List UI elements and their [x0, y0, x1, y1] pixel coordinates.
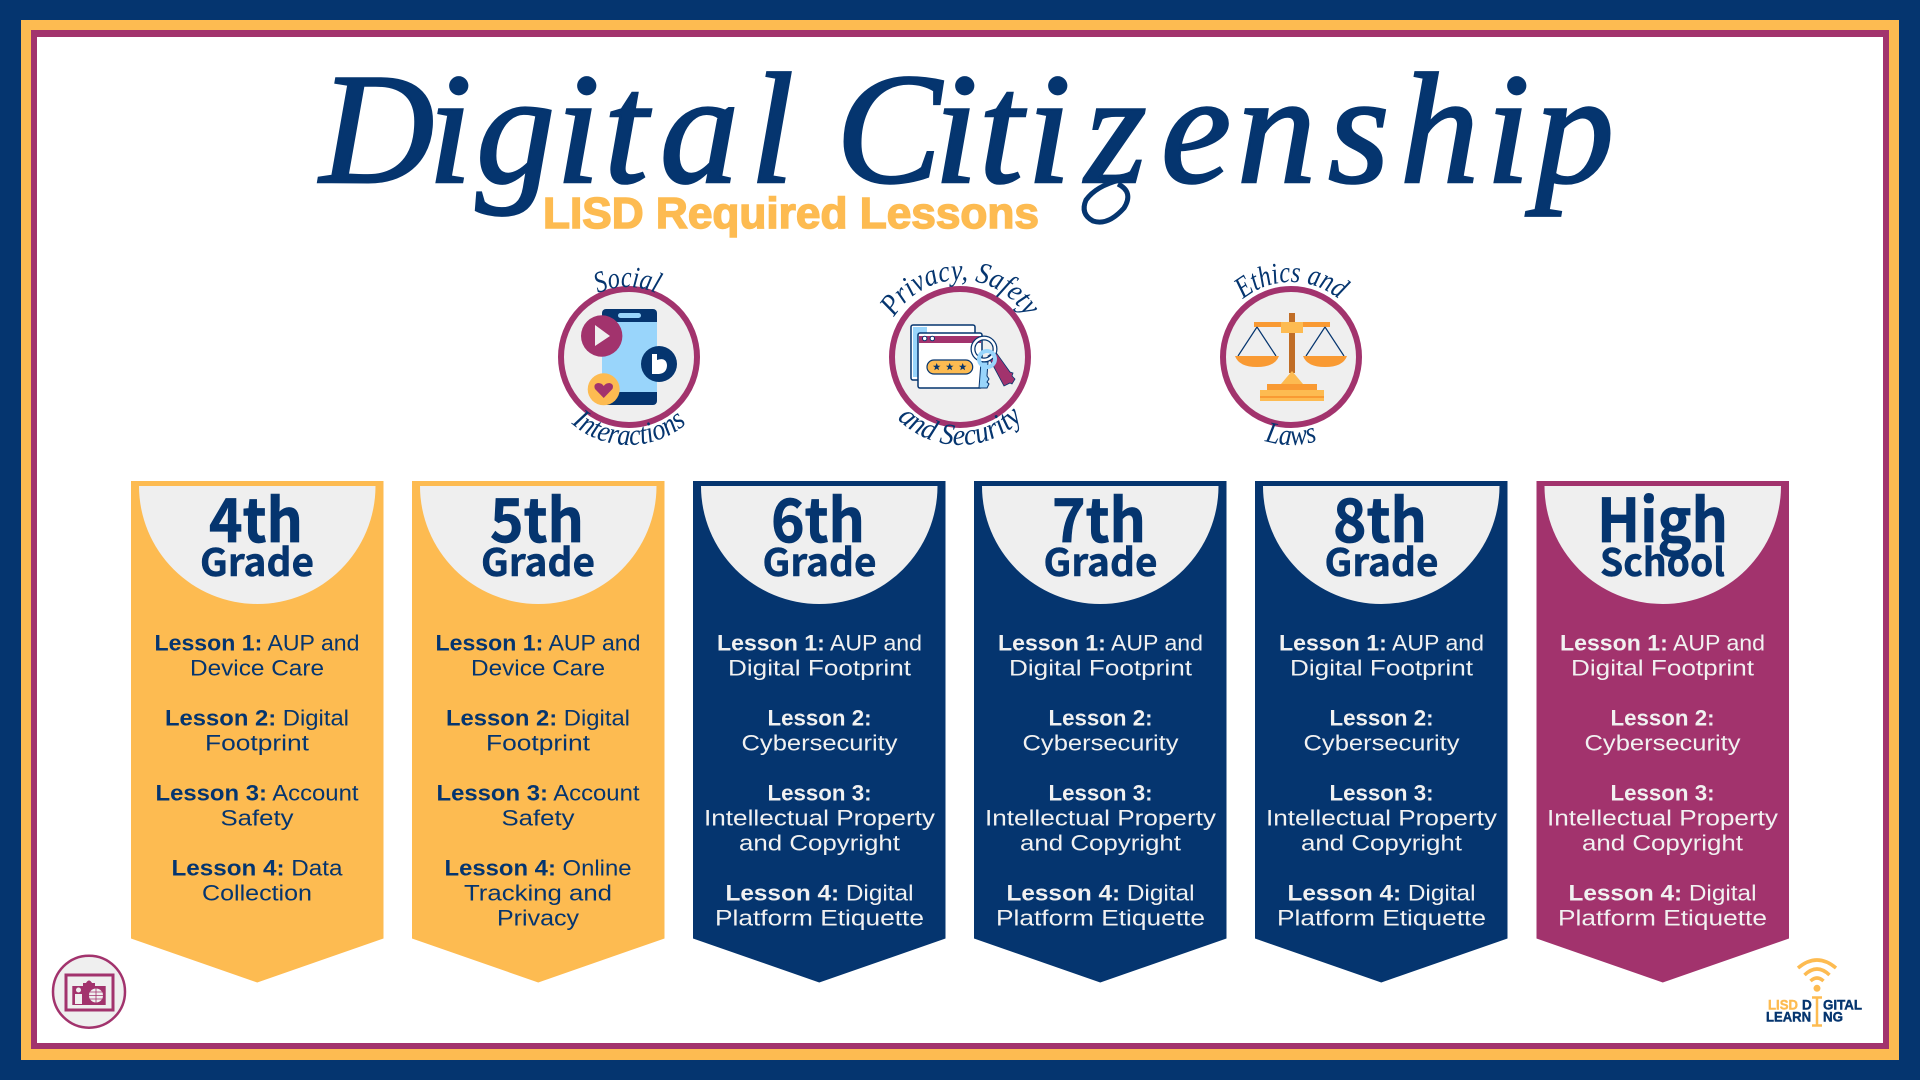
label: and Security: and Security: [898, 408, 1020, 446]
logo text: [1766, 998, 1862, 1024]
label: Ethics and: Ethics and: [1234, 264, 1352, 300]
panel: 7th grade: [974, 473, 1226, 982]
lessons: high school: Intellectual Property: [1547, 806, 1779, 830]
lessons: 4th grade: Safety: [220, 806, 294, 830]
icon: social interactions: [558, 268, 700, 446]
label: Social: Social: [594, 268, 664, 293]
lessons: 7th grade: Cybersecurity: [1022, 730, 1179, 756]
lessons: 5th grade: [436, 630, 640, 930]
lessons: 8th grade: Lesson 3:: [1330, 780, 1434, 806]
lessons: 4th grade: Device Care: [190, 656, 324, 680]
lessons: 5th grade: Lesson 1: AUP and: [436, 630, 640, 656]
label: Privacy, Safety: Privacy, Safety: [880, 264, 1038, 318]
lessons: 8th grade: [1266, 630, 1498, 930]
logo: LISD Digital Learning: [1766, 960, 1862, 1026]
lessons: 8th grade: Digital Footprint: [1290, 656, 1474, 680]
lessons: 5th grade: Footprint: [486, 730, 591, 756]
subtitle: LISD Required Lessons: [543, 189, 1039, 238]
heading: 8th grade: [1324, 473, 1438, 587]
heading: 8th grade: Grade: [1324, 532, 1438, 587]
lessons: 7th grade: Digital Footprint: [1009, 656, 1193, 680]
lessons: 4th grade: Lesson 4: Data: [172, 856, 343, 880]
lessons: 7th grade: [985, 630, 1217, 930]
lessons: 7th grade: Lesson 4: Digital: [1006, 880, 1194, 906]
lessons: 7th grade: Lesson 3:: [1048, 780, 1152, 806]
lessons: 8th grade: Intellectual Property: [1266, 806, 1498, 830]
heading: 4th grade: 4th: [209, 473, 303, 560]
lessons: 7th grade: Intellectual Property: [985, 806, 1217, 830]
lessons: 4th grade: Footprint: [205, 730, 310, 756]
lessons: 5th grade: Lesson 3: Account: [436, 780, 640, 806]
lessons: 7th grade: Lesson 2:: [1048, 706, 1152, 730]
lessons: high school: [1547, 630, 1779, 930]
lessons: high school: Lesson 3:: [1610, 780, 1714, 806]
lessons: 4th grade: Lesson 1: AUP and: [154, 630, 360, 656]
lessons: 8th grade: Lesson 4: Digital: [1288, 880, 1476, 906]
lessons: 7th grade: and Copyright: [1020, 830, 1182, 856]
heading: 4th grade: Grade: [200, 532, 314, 587]
title: Digital Citizenship: [318, 42, 1614, 217]
lessons: 8th grade: Cybersecurity: [1304, 730, 1460, 756]
heading: 5th grade: 5th: [490, 473, 584, 560]
logo text: LISD: [1768, 998, 1798, 1012]
lessons: 6th grade: Lesson 3:: [768, 780, 872, 806]
logo text: GITAL: [1823, 998, 1862, 1012]
lessons: 5th grade: Privacy: [497, 906, 580, 930]
lessons: 6th grade: Lesson 1: AUP and: [717, 630, 922, 656]
heading: 5th grade: [481, 473, 595, 587]
lessons: 5th grade: Device Care: [471, 656, 605, 680]
heading: 6th grade: [762, 473, 876, 587]
heading: 7th grade: Grade: [1044, 532, 1158, 587]
lessons: 6th grade: Cybersecurity: [742, 730, 898, 756]
label: Interactions: Interactions: [571, 410, 684, 446]
lessons: 8th grade: Lesson 2:: [1330, 706, 1434, 730]
label: Laws: Laws: [1264, 422, 1316, 446]
panel: 4th grade: [131, 473, 384, 982]
lessons: 5th grade: Tracking and: [464, 880, 612, 906]
lessons: 4th grade: Collection: [202, 880, 312, 906]
logo text: LEARN: [1766, 1010, 1811, 1024]
lessons: 8th grade: Platform Etiquette: [1277, 906, 1486, 930]
heading: 6th grade: 6th: [771, 473, 865, 560]
lessons: 8th grade: and Copyright: [1301, 830, 1463, 856]
lessons: 6th grade: Digital Footprint: [728, 656, 912, 680]
lessons: high school: Lesson 2:: [1610, 706, 1714, 730]
heading: 4th grade: [200, 473, 314, 587]
lessons: 7th grade: Lesson 1: AUP and: [998, 630, 1203, 656]
lessons: 4th grade: [154, 630, 360, 906]
lessons: 6th grade: Lesson 2:: [768, 706, 872, 730]
lessons: 4th grade: Lesson 2: Digital: [165, 706, 349, 730]
logo text: D: [1802, 998, 1812, 1012]
lessons: 8th grade: Lesson 1: AUP and: [1279, 630, 1484, 656]
lessons: 4th grade: Lesson 3: Account: [156, 780, 359, 806]
icon: ethics and laws: [1220, 264, 1362, 446]
lessons: high school: and Copyright: [1582, 830, 1744, 856]
panel: high school: [1536, 473, 1789, 982]
heading: 5th grade: Grade: [481, 532, 595, 587]
lessons: 6th grade: [704, 630, 936, 930]
lessons: 6th grade: and Copyright: [739, 830, 901, 856]
lessons: 6th grade: Platform Etiquette: [715, 906, 924, 930]
lessons: high school: Digital Footprint: [1571, 656, 1755, 680]
heading: 6th grade: Grade: [762, 532, 876, 587]
icon: digital ID badge: [53, 956, 125, 1028]
heading: 7th grade: 7th: [1052, 473, 1146, 560]
logo text: NG: [1823, 1010, 1843, 1024]
heading: 8th grade: 8th: [1333, 473, 1427, 560]
heading: high school: High: [1597, 473, 1728, 560]
panel: 5th grade: [412, 473, 664, 982]
icon: privacy, safety and security: [880, 264, 1038, 446]
lessons: 5th grade: Lesson 2: Digital: [446, 706, 630, 730]
lessons: high school: Cybersecurity: [1584, 730, 1741, 756]
heading: 7th grade: [1044, 473, 1158, 587]
lessons: 6th grade: Lesson 4: Digital: [726, 880, 914, 906]
heading: high school: School: [1600, 532, 1725, 587]
lessons: 5th grade: Safety: [502, 806, 575, 830]
lessons: 6th grade: Intellectual Property: [704, 806, 936, 830]
lessons: high school: Lesson 4: Digital: [1568, 880, 1756, 906]
lessons: high school: Platform Etiquette: [1558, 906, 1767, 930]
panel: 8th grade: [1255, 473, 1508, 982]
title flourish: z tail: [1084, 180, 1128, 222]
lessons: high school: Lesson 1: AUP and: [1560, 630, 1765, 656]
lessons: 7th grade: Platform Etiquette: [996, 906, 1205, 930]
lessons: 5th grade: Lesson 4: Online: [444, 856, 632, 880]
panel: 6th grade: [693, 473, 946, 982]
